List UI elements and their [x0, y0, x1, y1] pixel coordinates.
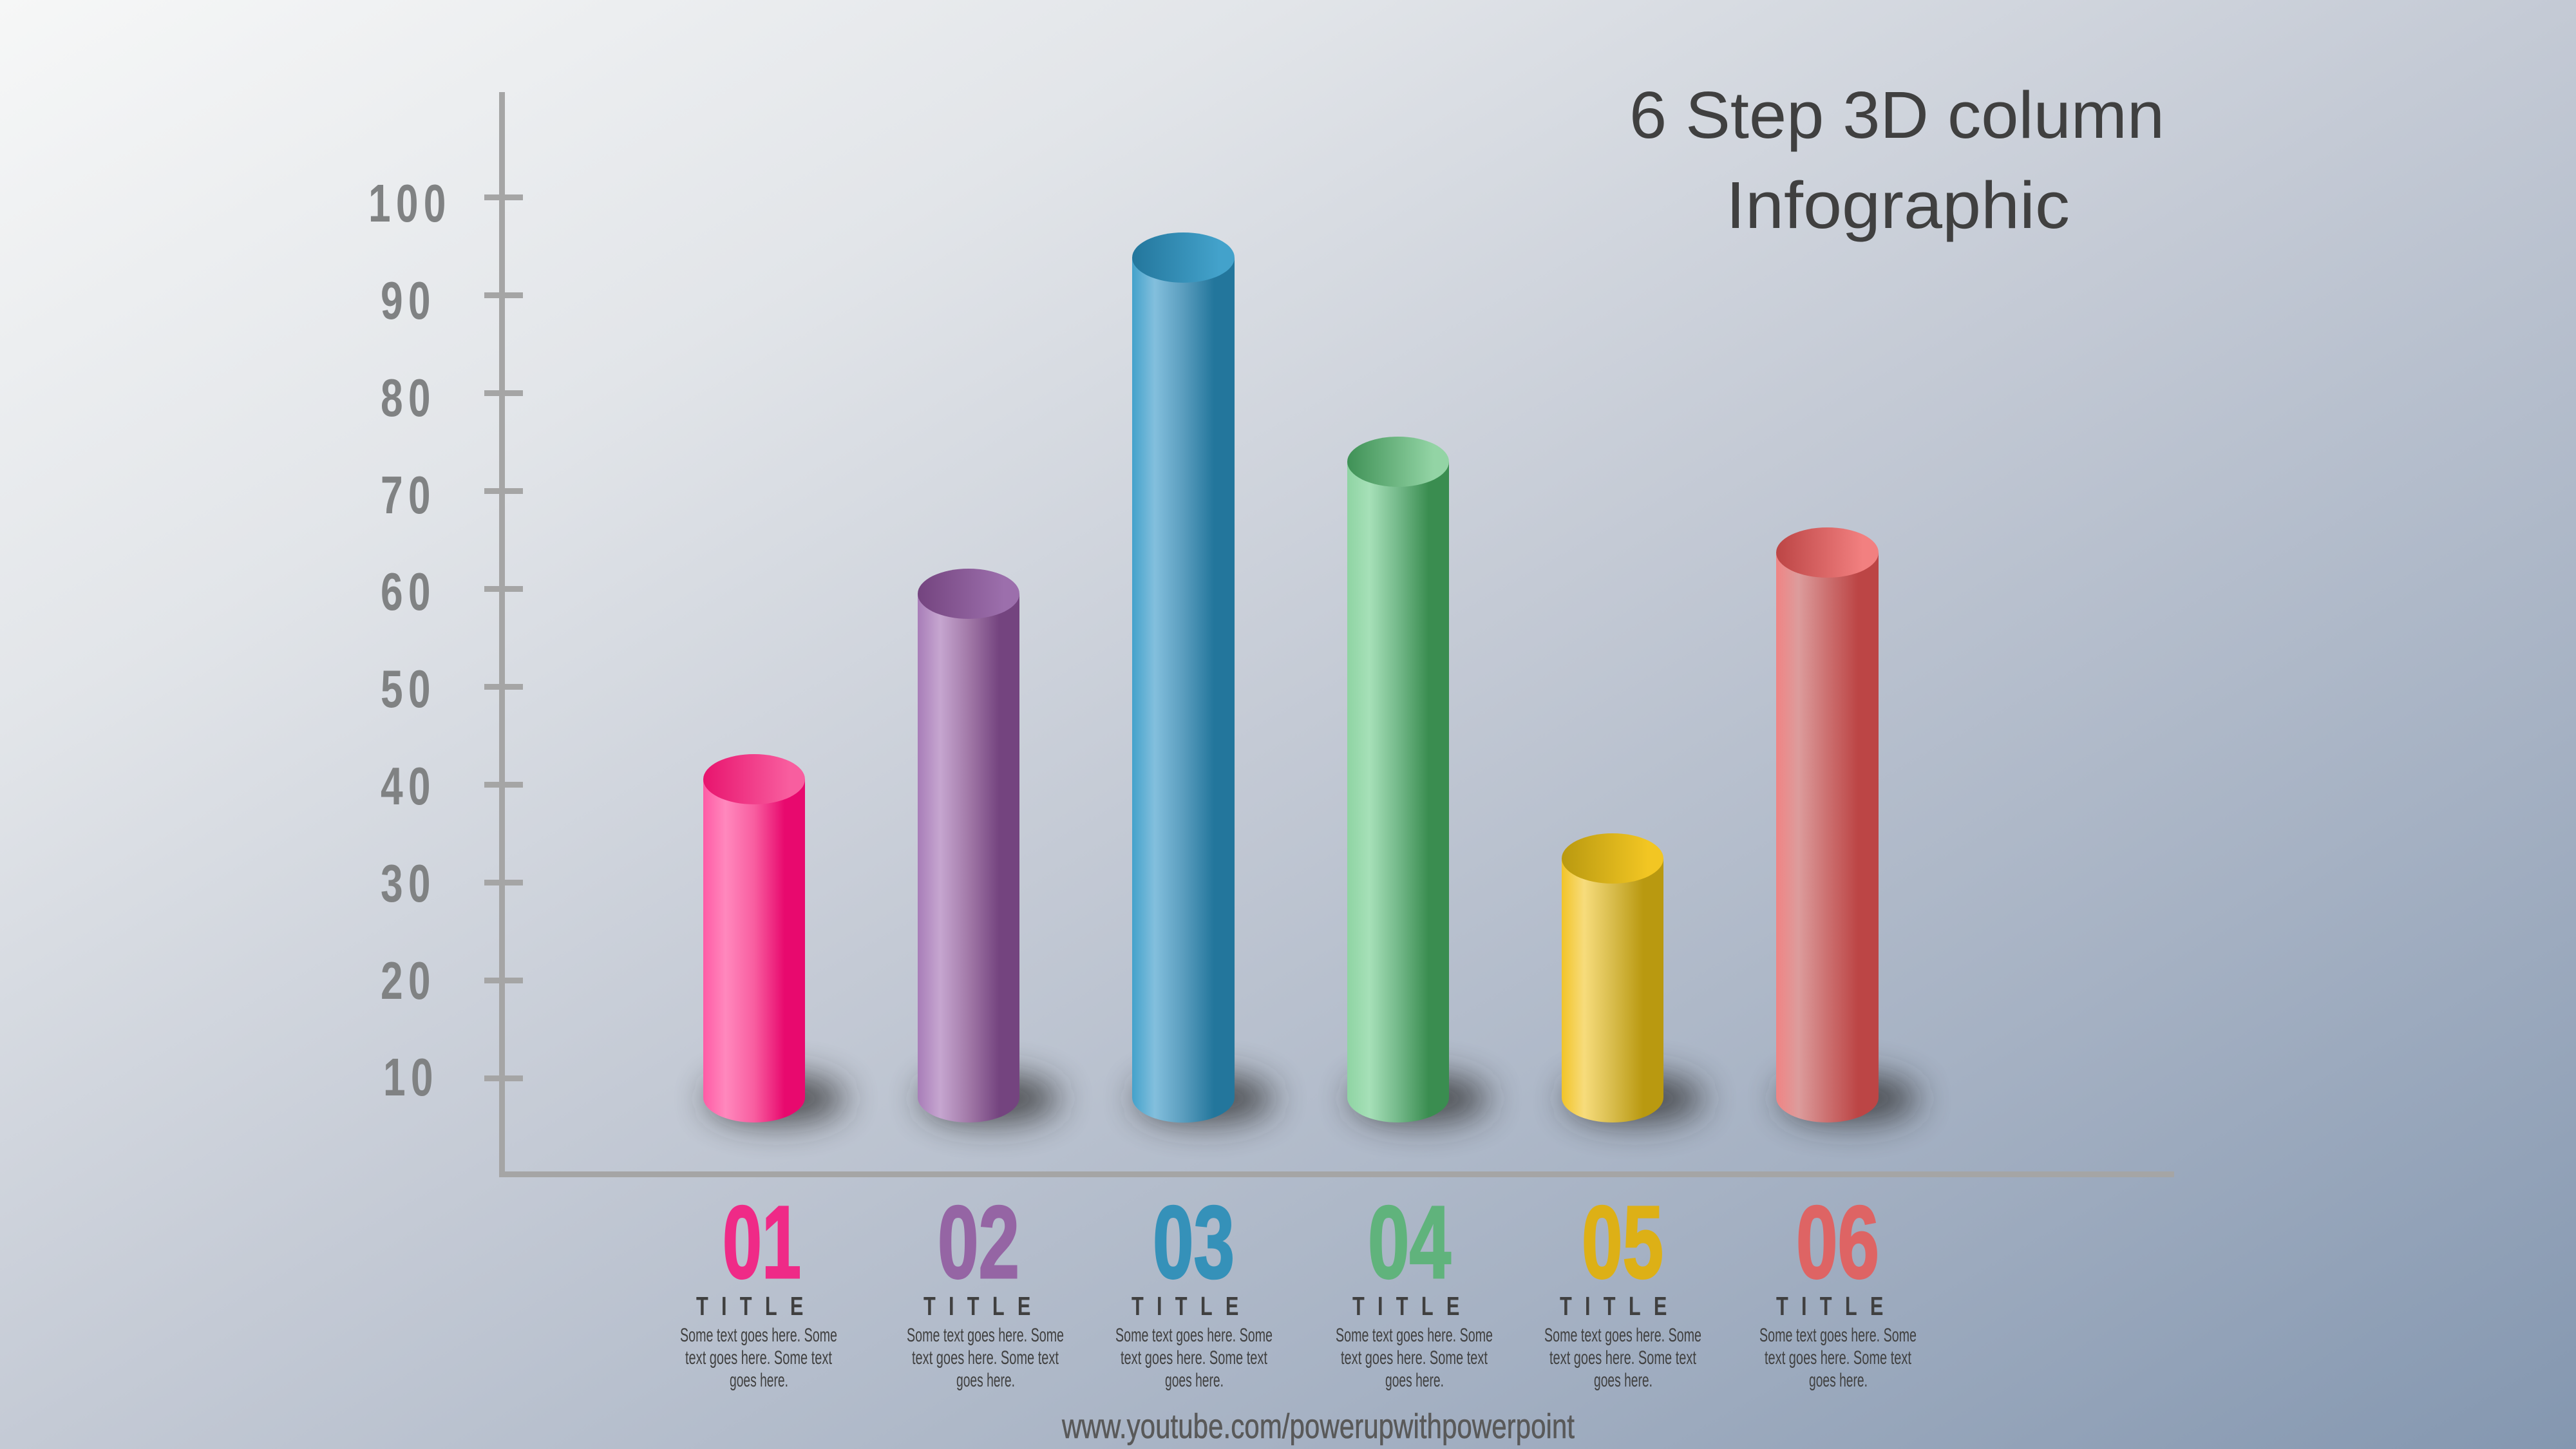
step 02 label: TITLE [923, 1291, 1044, 1321]
step 06 label [1759, 1184, 1917, 1391]
step 03 label: 03 [1153, 1184, 1235, 1300]
y axis labels: 90 [381, 270, 436, 330]
step 05 label: TITLE [1560, 1291, 1680, 1321]
step 03 label: TITLE [1132, 1291, 1252, 1321]
column 06 red [1776, 527, 1919, 1123]
step 06 label: TITLE [1776, 1291, 1897, 1321]
step 06 label: goes here. [1809, 1370, 1868, 1391]
column 05 yellow [1562, 833, 1704, 1123]
y axis labels: 10 [383, 1047, 439, 1107]
column 03 blue [1132, 232, 1274, 1123]
step 06 label: text goes here. Some text [1765, 1347, 1911, 1368]
step 04 label [1336, 1184, 1493, 1391]
step 01 label: 01 [723, 1184, 801, 1300]
step 02 label: text goes here. Some text [912, 1347, 1059, 1368]
y axis with tick marks [484, 92, 523, 1177]
step 01 label: TITLE [696, 1291, 817, 1321]
column 04 green [1347, 437, 1490, 1123]
chart title [1629, 78, 2164, 242]
step 04 label: Some text goes here. Some [1336, 1325, 1493, 1346]
y axis labels: 80 [381, 368, 436, 428]
step 05 label: goes here. [1594, 1370, 1653, 1391]
chart title: 6 Step 3D column [1629, 78, 2164, 152]
column 02 purple [918, 569, 1060, 1123]
step 04 label: text goes here. Some text [1341, 1347, 1488, 1368]
step 03 label: Some text goes here. Some [1115, 1325, 1273, 1346]
step 04 label: TITLE [1352, 1291, 1473, 1321]
y axis labels: 20 [381, 951, 436, 1010]
y axis labels: 60 [381, 562, 436, 621]
step 04 label: goes here. [1385, 1370, 1444, 1391]
y axis labels: 30 [381, 853, 436, 913]
column 01 pink [703, 754, 846, 1123]
step 03 label: text goes here. Some text [1121, 1347, 1267, 1368]
step 03 label: goes here. [1165, 1370, 1224, 1391]
step 06 label: Some text goes here. Some [1759, 1325, 1917, 1346]
y axis labels: 40 [381, 756, 436, 816]
chart title: Infographic [1726, 168, 2070, 242]
footer url: www.youtube.com/powerupwithpowerpoint [1061, 1407, 1575, 1446]
step 01 label: text goes here. Some text [685, 1347, 832, 1368]
step 06 label: 06 [1796, 1184, 1879, 1300]
step 04 label: 04 [1368, 1184, 1451, 1300]
step 01 label [680, 1184, 837, 1391]
y axis labels: 50 [381, 659, 436, 719]
step 02 label: goes here. [956, 1370, 1015, 1391]
step 02 label [907, 1184, 1064, 1391]
x axis [499, 1171, 2174, 1177]
step 05 label: Some text goes here. Some [1544, 1325, 1701, 1346]
step 02 label: 02 [938, 1184, 1019, 1300]
step 05 label [1544, 1184, 1701, 1391]
y axis labels: 70 [381, 465, 436, 525]
step 03 label [1115, 1184, 1273, 1391]
y axis labels: 100 [368, 173, 451, 233]
step 02 label: Some text goes here. Some [907, 1325, 1064, 1346]
step 01 label: Some text goes here. Some [680, 1325, 837, 1346]
step 01 label: goes here. [730, 1370, 788, 1391]
step 05 label: text goes here. Some text [1549, 1347, 1696, 1368]
step 05 label: 05 [1582, 1184, 1663, 1300]
y axis labels [368, 173, 451, 1107]
